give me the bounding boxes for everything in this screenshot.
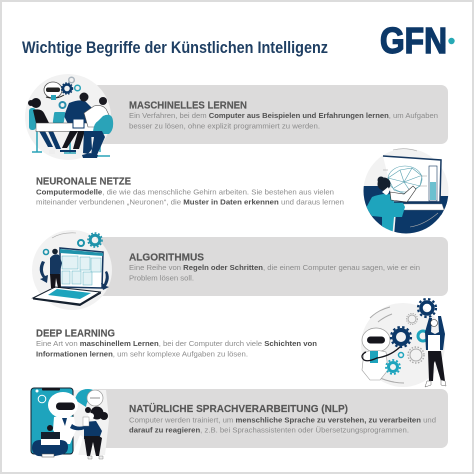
- body text: [129, 263, 420, 282]
- body text: miteinander verbundenen „Neuronen“, die Muster in Daten erkennen und daraus lernen: [36, 198, 344, 206]
- body text: Computer werden trainiert, um menschliche Sprache zu verstehen, zu verarbeiten und: [129, 416, 436, 424]
- panel background: [92, 85, 448, 144]
- body text: besser zu lösen, ohne explizit programmiert zu werden.: [129, 122, 320, 130]
- body text: Eine Art von maschinellem Lernen , bei der Computer durch viele Schichten von: [36, 339, 317, 348]
- heading: MASCHINELLES LERNEN: [129, 100, 247, 112]
- icon: phone with robot, person and speech bubble: [31, 388, 109, 459]
- body text: Eine Reihe von Regeln oder Schritten , die einem Computer genau sagen, wie er ein: [129, 263, 420, 272]
- body text: darauf zu reagieren , z.B. bei Sprachassistenten oder Übersetzungsprogrammen.: [129, 426, 409, 434]
- body text: [129, 416, 436, 434]
- title: Wichtige Begriffe der Künstlichen Intelligenz: [22, 39, 328, 57]
- body text: Ein Verfahren, bei dem Computer aus Beispielen und Erfahrungen lernen , um Aufgaben: [129, 111, 438, 120]
- panel: Natürliche Sprachverarbeitung: [31, 388, 448, 459]
- body text: [129, 111, 438, 130]
- panel background: [92, 237, 448, 296]
- body text: [36, 188, 344, 206]
- logo: GFN: GFN: [380, 20, 447, 61]
- panel: Deep Learning: [36, 299, 446, 387]
- body text: [36, 339, 317, 358]
- body text: Problem lösen soll.: [129, 274, 194, 282]
- icon: team at table with robot and gears: [25, 74, 113, 160]
- heading: ALGORITHMUS: [129, 252, 204, 264]
- icon: laptop with person and gears: [32, 230, 112, 310]
- panel: Maschinelles Lernen: [25, 74, 448, 160]
- icon: robot, gears and person holding gear: [361, 299, 446, 387]
- body text: Informationen lernen , um sehr komplexe Aufgaben zu lösen.: [36, 350, 248, 358]
- icon: person touching neural network on screen: [364, 148, 448, 234]
- heading: NEURONALE NETZE: [36, 176, 131, 188]
- heading: DEEP LEARNING: [36, 328, 115, 340]
- panel: Algorithmus: [32, 230, 448, 310]
- panel background: [92, 389, 448, 448]
- panel: Neuronale Netze: [36, 148, 452, 239]
- body text: Computermodelle , die wie das menschliche Gehirn arbeiten. Sie bestehen aus vielen: [36, 188, 334, 196]
- heading: NATÜRLICHE SPRACHVERARBEITUNG (NLP): [129, 402, 348, 415]
